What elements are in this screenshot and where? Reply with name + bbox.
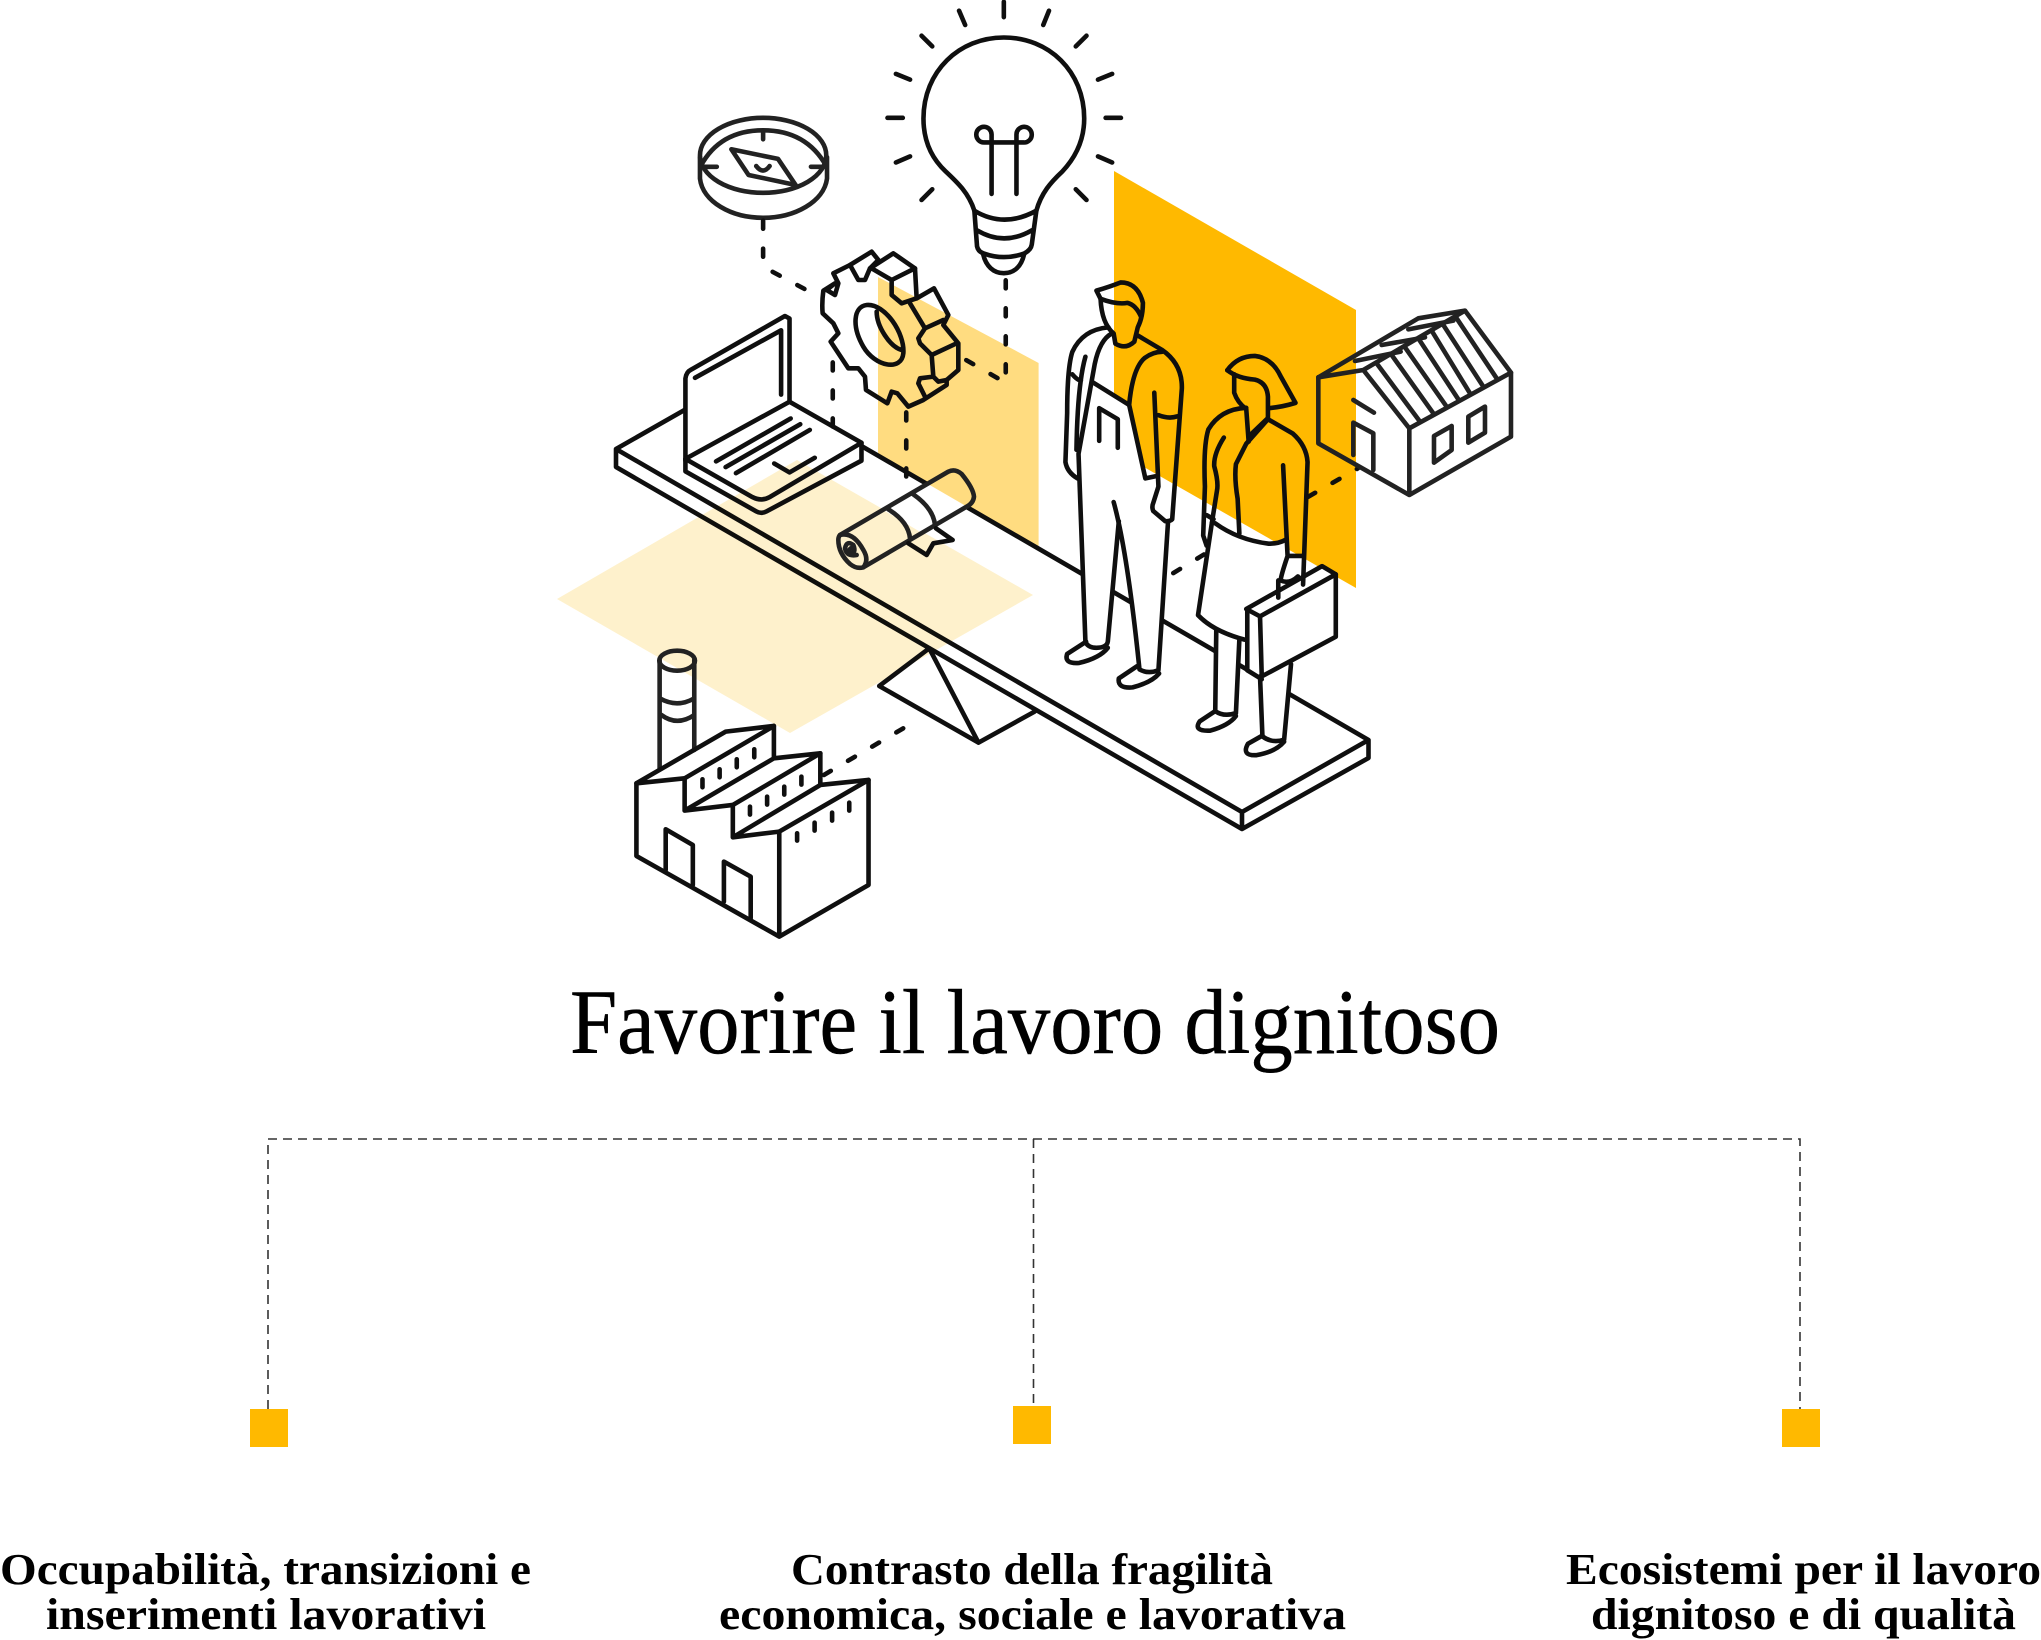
label: ecosistemi: Ecosistemi per il lavoro xyxy=(1566,1545,2041,1594)
connector: fulcrum to factory xyxy=(824,718,920,775)
icon: gear xyxy=(822,252,958,407)
icon: light bulb xyxy=(887,2,1121,273)
label: contrasto della fragilità: economica, sociale e lavorativa xyxy=(719,1590,1346,1639)
label: contrasto della fragilità xyxy=(719,1545,1346,1639)
balance beam xyxy=(616,377,1368,829)
connector: gear to scroll xyxy=(904,412,909,486)
icon: laptop xyxy=(685,316,861,513)
icon: compass xyxy=(700,118,827,218)
label: contrasto della fragilità: Contrasto della fragilità xyxy=(791,1545,1273,1594)
panel: pale cream floor plane xyxy=(557,460,1033,733)
label: ecosistemi: dignitoso e di qualità xyxy=(1591,1590,2016,1639)
illustration: balance beam with work symbols xyxy=(557,2,1511,937)
connector: woman to house xyxy=(1308,468,1358,497)
connector: people to gear xyxy=(1173,554,1205,573)
icon: diploma scroll xyxy=(836,468,976,570)
panel: light yellow plane xyxy=(878,277,1039,560)
marker: left xyxy=(250,1409,288,1447)
label: occupabilità: inserimenti lavorativi xyxy=(46,1590,486,1639)
person: woman with briefcase xyxy=(1198,356,1336,755)
icon: house xyxy=(1318,311,1511,495)
laptop fill xyxy=(685,316,861,512)
connector: compass to gear xyxy=(763,221,812,293)
connector: bulb to gear xyxy=(961,280,1006,383)
title: Favorire il lavoro dignitoso xyxy=(570,971,1500,1073)
dashed connector tree xyxy=(268,1139,1800,1409)
marker: center xyxy=(1013,1406,1051,1444)
panel: bright yellow plane xyxy=(1114,171,1356,588)
fulcrum xyxy=(879,648,1035,743)
label: ecosistemi xyxy=(1566,1545,2041,1639)
connector: gear to laptop xyxy=(830,362,835,436)
label: occupabilità: Occupabilità, transizioni e xyxy=(0,1545,531,1594)
marker: right xyxy=(1782,1409,1820,1447)
icon: factory xyxy=(636,651,869,937)
person: man xyxy=(1065,282,1182,689)
label: occupabilità xyxy=(0,1545,531,1639)
